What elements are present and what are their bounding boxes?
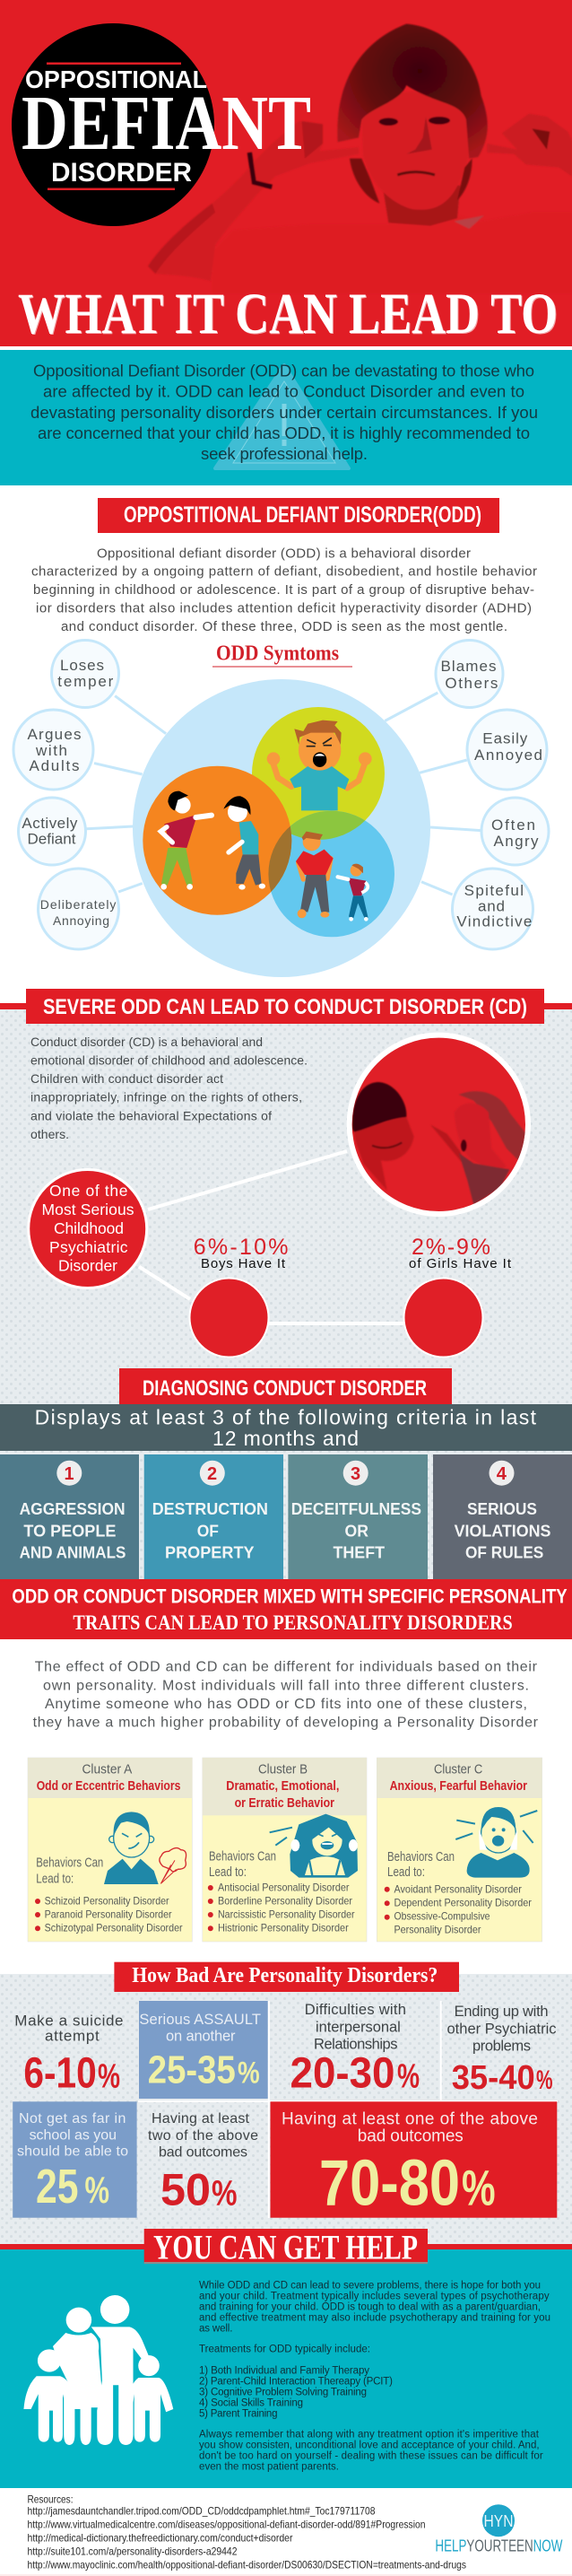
card: cluster C: Personality Disorder — [394, 1923, 481, 1935]
criterion 2: PROPERTY — [165, 1543, 255, 1562]
text block: treatment: and your child. Treatment typically includes several types of psychotherapy — [199, 2292, 550, 2302]
text block: intro — [30, 361, 538, 463]
criterion 1: 1 — [65, 1464, 74, 1484]
card: cluster C: Avoidant Personality Disorder — [394, 1882, 522, 1895]
text block: treatment: 5) Parent Training — [199, 2408, 278, 2419]
text block: ODD definition: beginning in childhood or adolescence. It is part of a group of disruptive behav- — [33, 582, 534, 598]
criterion 1: AGGRESSION — [20, 1499, 126, 1518]
bubble labels: Often — [491, 816, 535, 834]
heading: diagnosing: DIAGNOSING CONDUCT DISORDER — [143, 1376, 427, 1401]
card: cluster A — [28, 1758, 192, 1942]
stat: girls: of Girls Have It — [409, 1256, 512, 1271]
text block: treatment: Always remember that along with any treatment option it's imperitive that — [199, 2430, 540, 2441]
bubble labels: Argues — [27, 726, 81, 743]
stat: school: 25 — [36, 2160, 79, 2214]
heading: how bad: How Bad Are Personality Disorders? — [132, 1964, 438, 1987]
stat: relationships: Difficulties with — [305, 2002, 406, 2018]
bubble labels: Angry — [493, 833, 539, 850]
stat: boys: Boys Have It — [201, 1256, 286, 1271]
stat: two outcomes: % — [212, 2173, 237, 2213]
bubble labels: Vindictive — [456, 913, 532, 930]
stat: boys — [190, 1235, 289, 1357]
bubble labels: Spiteful — [464, 882, 524, 899]
criterion 2: OF — [197, 1522, 219, 1541]
stat: one outcome: % — [462, 2159, 496, 2215]
stat: school — [13, 2101, 137, 2218]
criterion 3 — [288, 1454, 428, 1579]
logo: help your teen now — [435, 2504, 562, 2554]
card: cluster C: Obsessive-Compulsive — [394, 1909, 490, 1922]
text block: intro: are affected by it. ODD can lead to Conduct Disorder and even to — [43, 382, 524, 401]
callout: most serious: Disorder — [58, 1257, 117, 1275]
bubble labels: Defiant — [27, 831, 76, 847]
stat: two outcomes: 50 — [160, 2164, 211, 2214]
icon: warning triangle — [215, 365, 349, 468]
card: cluster A: Odd or Eccentric Behaviors — [37, 1778, 180, 1794]
text block: resources: http://www.virtualmedicalcentre.com/diseases/oppositional-defiant-disorder-odd/891#Progression — [27, 2518, 425, 2530]
card: cluster B: Antisocial Personality Disorder — [218, 1881, 350, 1893]
stat: boys: 6%-10% — [194, 1235, 289, 1260]
text block: conduct disorder: others. — [30, 1127, 69, 1141]
card: cluster B: Borderline Personality Disorder — [218, 1894, 352, 1907]
text block: treatment: even the most patient parents. — [199, 2461, 339, 2472]
card: cluster A: Cluster A — [82, 1762, 132, 1777]
text block: conduct disorder — [30, 1035, 308, 1141]
stat: psychiatric: % — [536, 2065, 552, 2095]
criterion 3: OR — [344, 1522, 368, 1541]
card: cluster B: Cluster B — [258, 1762, 308, 1777]
heading: get help: YOU CAN GET HELP — [153, 2229, 418, 2267]
stat: two outcomes: Having at least — [152, 2111, 250, 2126]
bubble labels: Annoying — [53, 913, 109, 928]
card: cluster C: Behaviors Can — [387, 1850, 455, 1864]
text block: conduct disorder: and violate the behavioral Expectations of — [30, 1108, 272, 1122]
stat: two outcomes — [148, 2111, 258, 2214]
stat: school: % — [84, 2169, 109, 2211]
card: cluster B: Histrionic Personality Disorder — [218, 1921, 349, 1934]
stat: suicide — [14, 2013, 123, 2098]
heading: ODD — [98, 498, 499, 533]
stat: one outcome — [271, 2101, 557, 2219]
text block: intro: Oppositional Defiant Disorder (ODD) can be devastating to those who — [33, 361, 534, 380]
text block: treatment: and effective treatment may also include psychotherapy and training for you — [199, 2312, 550, 2323]
icon: angry face — [104, 1812, 186, 1884]
card: cluster C — [377, 1758, 542, 1942]
text block: conduct disorder: Children with conduct disorder act — [30, 1071, 223, 1086]
panel: criteria — [0, 1404, 572, 1579]
card: cluster A: Paranoid Personality Disorder — [45, 1908, 172, 1920]
stat: one outcome: bad outcomes — [358, 2127, 464, 2146]
panel: you can get help — [0, 2229, 572, 2488]
panel: how bad — [0, 1962, 572, 2244]
text block: treatment: and training for your child. ODD is tough to deal with as a parent/guardian, — [199, 2302, 541, 2313]
text block: treatment: 4) Social Skills Training — [199, 2397, 303, 2408]
banner: personality: TRAITS CAN LEAD TO PERSONALITY DISORDERS — [73, 1611, 513, 1634]
text block: resources: Resources: — [27, 2493, 74, 2505]
text block: personality: own personality. Most individuals will fall into three different clusters. — [43, 1678, 529, 1693]
text block: personality — [33, 1660, 539, 1730]
card: cluster B: or Erratic Behavior — [235, 1795, 334, 1811]
text block: treatment: 2) Parent-Child Interaction Thereapy (PCIT) — [199, 2377, 393, 2388]
bubble labels: and — [478, 897, 505, 915]
stat: relationships: % — [397, 2058, 420, 2096]
bubble labels: Adults — [29, 757, 79, 774]
logo: help your teen now: HYN — [484, 2512, 513, 2530]
banner: criteria — [0, 1404, 572, 1451]
figure: walking boy — [223, 796, 265, 890]
text block: personality: Anytime someone who has ODD or CD fits into one of these clusters, — [45, 1697, 527, 1712]
badge: title circle — [12, 23, 311, 226]
callout: most serious: Most Serious — [41, 1201, 134, 1218]
criterion 4 — [433, 1454, 572, 1579]
text block: treatment: as well. — [199, 2323, 232, 2334]
text block: resources — [27, 2493, 466, 2571]
stat: assault: % — [238, 2056, 260, 2091]
banner: criteria: Displays at least 3 of the following criteria in last — [35, 1406, 537, 1429]
card: cluster B: Dramatic, Emotional, — [226, 1778, 339, 1794]
criterion 4: 4 — [497, 1464, 507, 1484]
bubble labels: Annoyed — [474, 747, 542, 764]
text block: resources: http://medical-dictionary.thefreedictionary.com/conduct+disorder — [27, 2531, 293, 2544]
criterion 1: AND ANIMALS — [20, 1543, 126, 1562]
criterion 3: THEFT — [334, 1543, 386, 1562]
criterion 1 — [0, 1454, 139, 1579]
criterion 2 — [144, 1454, 283, 1579]
criterion 1: TO PEOPLE — [23, 1522, 116, 1541]
panel: resources — [0, 2493, 572, 2576]
text block: treatment: While ODD and CD can lead to severe problems, there is hope for both you — [199, 2281, 541, 2292]
text block: conduct disorder: inappropriately, infringe on the rights of others, — [30, 1090, 302, 1105]
stat: assault: on another — [166, 2028, 236, 2044]
stat: suicide: attempt — [45, 2027, 100, 2044]
text block: personality: they have a much higher probability of developing a Personality Disorder — [33, 1715, 539, 1730]
stat: two outcomes: two of the above — [148, 2128, 258, 2144]
bubble labels: Others — [445, 675, 498, 692]
card: cluster A: Schizotypal Personality Disorder — [45, 1921, 183, 1934]
figure: shouting man — [267, 720, 372, 810]
connector lines — [139, 1151, 403, 1323]
stat: school: Not get as far in — [19, 2111, 126, 2126]
panel: personality disorders — [0, 1579, 572, 1942]
criterion 4: SERIOUS — [467, 1499, 537, 1518]
stat: relationships — [290, 2002, 420, 2098]
badge: title circle: DEFIANT — [22, 79, 311, 166]
logo: help your teen now: HELPYOURTEENNOW — [435, 2537, 562, 2554]
stat: relationships: interpersonal — [316, 2019, 401, 2035]
text block: treatment: don't be too hard on yourself - dealing with these issues can be difficult for — [199, 2451, 543, 2462]
stat: assault: Serious ASSAULT — [139, 2012, 261, 2028]
criterion 3: DECEITFULNESS — [291, 1499, 421, 1518]
text block: intro: devastating personality disorders under certain circumstances. If you — [30, 403, 538, 422]
criterion 3: 3 — [351, 1464, 360, 1484]
stat: suicide: % — [98, 2058, 120, 2096]
text block: treatment: 1) Both Individual and Family Therapy — [199, 2366, 369, 2377]
stat: one outcome: 70-80 — [319, 2147, 460, 2219]
heading: ODD symptoms: ODD Symtoms — [216, 642, 339, 666]
banner: personality — [0, 1579, 572, 1639]
bubble labels: Blames — [441, 658, 497, 675]
stat: psychiatric: Ending up with — [455, 2004, 549, 2020]
card: cluster B: Narcissistic Personality Disorder — [218, 1908, 355, 1920]
photo: children shouting — [350, 1035, 528, 1214]
connectors — [86, 693, 481, 895]
card: cluster C: Lead to: — [387, 1865, 425, 1880]
text block: conduct disorder: emotional disorder of childhood and adolescence. — [30, 1052, 308, 1067]
bubbles: symptoms left — [13, 641, 549, 949]
stat: suicide: 6-10 — [23, 2050, 97, 2098]
stat: one outcome: Having at least one of the above — [282, 2109, 538, 2128]
panel: introduction — [0, 350, 572, 485]
stat: psychiatric: other Psychiatric — [446, 2022, 556, 2038]
text block: treatment: Treatments for ODD typically include: — [199, 2345, 370, 2355]
bubble labels — [22, 657, 542, 930]
criterion 4: OF RULES — [465, 1543, 543, 1562]
card: cluster C: Dependent Personality Disorder — [394, 1896, 532, 1908]
stat: assault: 25-35 — [148, 2048, 236, 2092]
card: cluster A: Lead to: — [36, 1872, 74, 1886]
icon: frustrated girl — [270, 1814, 358, 1878]
criterion 2: 2 — [207, 1464, 217, 1484]
text block: resources: http://suite101.com/a/personality-disorders-a29442 — [27, 2545, 238, 2557]
text block: ODD definition — [31, 546, 537, 634]
text block: ODD definition: and conduct disorder. Of these three, ODD is seen as the most gentle. — [61, 619, 507, 634]
text block: treatment — [199, 2281, 550, 2472]
callout: most serious: One of the — [49, 1182, 127, 1200]
figure: pointing man — [160, 791, 212, 890]
text block: resources: http://www.mayoclinic.com/health/oppositional-defiant-disorder/DS00630/DSECTION=treatments-and-drugs — [27, 2558, 466, 2571]
text block: ODD definition: characterized by a ongoing pattern of defiant, disobedient, and hostile behavior — [31, 564, 537, 580]
text block: conduct disorder: Conduct disorder (CD) is a behavioral and — [30, 1035, 263, 1049]
stat: school: should be able to — [17, 2144, 128, 2160]
bubble labels: Deliberately — [40, 897, 116, 912]
criterion 2: DESTRUCTION — [152, 1499, 268, 1518]
criterion 4: VIOLATIONS — [455, 1522, 550, 1541]
stat: relationships: 20-30 — [290, 2050, 394, 2098]
callout: most serious — [29, 1170, 147, 1288]
stat: psychiatric — [446, 2004, 556, 2097]
card: cluster A: Behaviors Can — [36, 1856, 103, 1871]
photo: boy covering ears — [148, 24, 572, 293]
text block: resources: http://jamesdauntchandler.tripod.com/ODD_CD/oddcdpamphlet.htm#_Toc179711708 — [27, 2504, 376, 2517]
grid separators — [138, 2001, 558, 2218]
callout: most serious: Childhood — [54, 1219, 124, 1237]
text block: intro: seek professional help. — [201, 444, 368, 463]
text block: ODD definition: ior disorders that also includes attention deficit hyperactivity disorder (ADHD) — [36, 600, 532, 616]
bubble labels: temper — [57, 673, 114, 690]
text block: ODD definition: Oppositional defiant disorder (ODD) is a behavioral disorder — [97, 546, 471, 561]
stat: school: school as you — [30, 2127, 117, 2143]
panel: header — [0, 0, 572, 346]
card: cluster A: Schizoid Personality Disorder — [45, 1894, 169, 1907]
panel: ODD definition — [13, 498, 549, 977]
callout: most serious: Psychiatric — [49, 1238, 128, 1256]
card: cluster C: Anxious, Fearful Behavior — [390, 1778, 527, 1794]
banner: criteria: 12 months and — [212, 1427, 359, 1450]
badge: title circle: OPPOSITIONAL — [25, 65, 207, 93]
figures — [160, 720, 372, 921]
text block: treatment: 3) Cognitive Problem Solving Training — [199, 2387, 367, 2397]
stat: relationships: Relationships — [314, 2037, 398, 2053]
stat: suicide: Make a suicide — [14, 2013, 123, 2030]
badge: title circle: DISORDER — [51, 158, 192, 188]
panel: conduct disorder — [0, 989, 572, 1404]
stat: girls: 2%-9% — [412, 1235, 490, 1260]
bubble labels: Loses — [60, 657, 104, 674]
stat: psychiatric: problems — [472, 2039, 531, 2055]
text block: personality: The effect of ODD and CD can be different for individuals based on their — [35, 1660, 538, 1675]
figure: child — [338, 864, 368, 921]
icon: fearful face — [455, 1807, 537, 1878]
stat: assault — [139, 2001, 268, 2099]
bubble labels: Easily — [482, 730, 528, 747]
bubble labels: Actively — [22, 815, 78, 832]
card: cluster B: Behaviors Can — [209, 1850, 276, 1864]
stat: psychiatric: 35-40 — [452, 2059, 535, 2097]
text block: intro: are concerned that your child has ODD, it is highly recommended to — [38, 424, 530, 442]
bubble labels: with — [35, 742, 67, 759]
figure: adult — [296, 832, 334, 918]
card: cluster C: Cluster C — [434, 1762, 482, 1777]
stat: two outcomes: bad outcomes — [159, 2144, 247, 2160]
card: cluster B: Lead to: — [209, 1865, 247, 1880]
stat: girls — [403, 1235, 512, 1357]
card: cluster B — [203, 1758, 367, 1942]
diagram: symptoms circles — [133, 679, 430, 977]
heading: conduct disorder — [26, 989, 544, 1024]
text block: treatment: you show consisten, unconditional love and acceptance of your child. And, — [199, 2441, 540, 2451]
icon: family — [23, 2295, 173, 2445]
heading: diagnosing — [119, 1368, 452, 1404]
